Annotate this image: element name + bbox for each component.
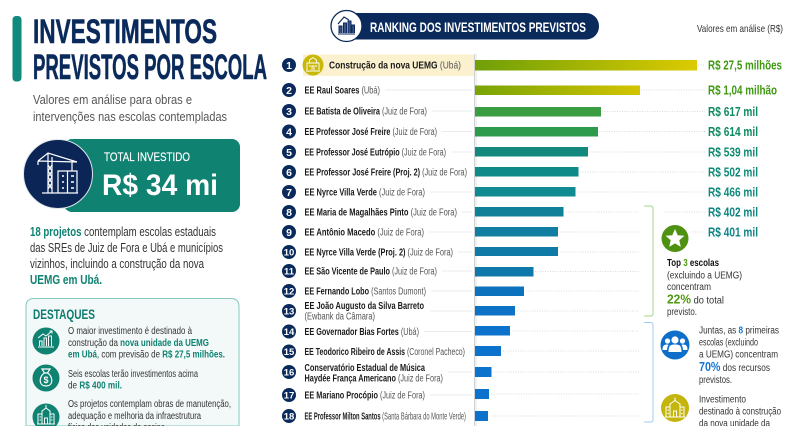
title: INVESTIMENTOS (33, 13, 217, 51)
row 5: EE Professor José Eutrópio (Juiz de Fora) (304, 148, 446, 158)
row 3: 3 (286, 106, 292, 118)
row 3: EE Batista de Oliveira (Juiz de Fora) (304, 106, 427, 118)
row 9 (282, 225, 758, 240)
row 3: R$ 617 mil (708, 105, 758, 119)
callout text: concentram (667, 282, 711, 293)
row 8: 8 (286, 207, 292, 219)
row 13: EE João Augusto da Silva Barreto (304, 301, 424, 312)
row 15: EE Teodorico Ribeiro de Assis (Coronel Pacheco) (304, 347, 465, 358)
row 4: 4 (286, 126, 292, 138)
row 12 (282, 284, 639, 298)
row 16 (282, 363, 639, 384)
callout text: escolas (excluindo (699, 338, 758, 348)
icon: money bag (32, 364, 60, 392)
row 9: 9 (286, 227, 292, 239)
highlight text: project scope: adequação e melhoria da infraestrutura (68, 411, 201, 422)
row 2: 2 (286, 85, 292, 97)
row 18: EE Professor Milton Santos (Santa Bárbara do Monte Verde) (304, 412, 466, 422)
highlight text: biggest investment: em Ubá, com previsão de R$ 27,5 milhões. (68, 350, 225, 360)
callout text: destinado à construção (699, 406, 781, 418)
row 5: 5 (286, 147, 292, 159)
callout text (699, 326, 779, 386)
row 2 (282, 83, 777, 98)
row 1: R$ 27,5 milhões (708, 58, 782, 72)
row 2: R$ 1,04 milhão (708, 84, 777, 98)
total label: TOTAL INVESTIDO (104, 150, 190, 164)
row 4 (282, 124, 758, 139)
row 15: 15 (284, 347, 295, 358)
title block (12, 13, 267, 87)
icon: crane and building (24, 140, 92, 208)
callout text: Top 3 escolas (667, 258, 719, 269)
row 5: R$ 539 mil (708, 146, 758, 160)
icon: money bag: $ (43, 375, 49, 385)
callout text: 22% do total (667, 292, 724, 306)
row 11 (282, 264, 639, 278)
row 3 (282, 104, 758, 119)
row 5 (282, 145, 758, 160)
row 11: EE São Vicente de Paulo (Juiz de Fora) (304, 266, 437, 278)
intro paragraph: vizinhos, incluindo a construção da nova (30, 257, 204, 271)
row 6: 6 (286, 167, 292, 179)
row 1: 1 (286, 60, 292, 72)
callout text: previstos. (699, 375, 732, 386)
row 7: EE Nyrce Villa Verde (Juiz de Fora) (304, 188, 425, 198)
row 1: Construção da nova UEMG (Ubá) (329, 60, 461, 72)
row 10 (282, 245, 639, 259)
highlighted row background (303, 54, 474, 76)
row 6: R$ 502 mil (708, 166, 758, 180)
callout: top 3 schools (662, 225, 742, 318)
row 10: EE Nyrce Villa Verde (Proj. 2) (Juiz de Fora) (304, 248, 453, 258)
icon: star (662, 225, 688, 252)
panel: destaques (26, 298, 239, 426)
row 7 (282, 185, 758, 200)
title: PREVISTOS POR ESCOLA (33, 48, 267, 87)
callout: eight schools (660, 326, 779, 386)
row 13 (282, 301, 639, 322)
destaques heading: DESTAQUES (33, 306, 95, 322)
row 4: R$ 614 mil (708, 125, 758, 139)
row 2: EE Raul Soares (Ubá) (304, 86, 380, 96)
row 10: 10 (284, 248, 294, 258)
row 13: (Ewbank da Câmara) (304, 312, 375, 322)
row 14: EE Governador Bias Fortes (Ubá) (304, 327, 419, 338)
callout text (667, 258, 742, 318)
callout text: Investimento (699, 394, 746, 406)
row 16: 16 (284, 368, 294, 378)
highlight text: six schools (68, 369, 198, 392)
row 11: 11 (284, 266, 295, 278)
row 8: EE Maria de Magalhães Pinto (Juiz de Fora) (304, 208, 457, 218)
row 16: Haydée França Americano (Juiz de Fora) (304, 374, 443, 384)
highlight text: biggest investment (68, 326, 225, 360)
row 17: EE Mariano Procópio (Juiz de Fora) (304, 390, 425, 402)
icon: people (660, 330, 690, 360)
title (33, 13, 267, 87)
highlight text: six schools: de R$ 400 mil. (68, 380, 122, 392)
callout text: 70% dos recursos (699, 359, 770, 374)
callout text: Juntas, as 8 primeiras (699, 326, 779, 336)
row 17: 17 (284, 390, 294, 402)
row 1 (282, 54, 782, 76)
chart axis (474, 54, 477, 426)
row 6: EE Professor José Freire (Proj. 2) (Juiz de Fora) (304, 168, 467, 178)
row 15 (282, 344, 639, 358)
bracket: top schools (644, 206, 653, 316)
callout text: (excluindo a UEMG) (667, 270, 742, 282)
ranking header (331, 10, 599, 42)
row 9: R$ 401 mil (708, 226, 758, 240)
icon: growth chart (32, 328, 60, 354)
row 7: R$ 466 mil (708, 186, 758, 200)
bracket: first schools (644, 322, 653, 422)
row 8: R$ 402 mil (708, 206, 758, 220)
icon: university building (661, 394, 689, 422)
callout text (699, 394, 781, 426)
row 12: EE Fernando Lobo (Santos Dumont) (304, 286, 426, 298)
intro paragraph: 18 projetos contemplam escolas estaduais (30, 225, 216, 239)
highlight text: biggest investment: construção da nova unidade da UEMG (68, 338, 209, 349)
total invested card (24, 139, 240, 212)
title accent bar (12, 16, 22, 82)
ranking bar chart (282, 54, 782, 423)
subtitle: Valores em análise para obras e (33, 92, 192, 107)
row 18 (282, 409, 639, 423)
total value: R$ 34 mi (102, 169, 218, 202)
highlight text: biggest investment: O maior investimento é destinado à (68, 326, 192, 337)
row 12: 12 (284, 286, 294, 298)
row 9: EE Antônio Macedo (Juiz de Fora) (304, 228, 424, 238)
highlight text: project scope (68, 399, 231, 426)
row 17 (282, 388, 639, 402)
intro paragraph (30, 225, 223, 287)
callout text: a UEMG) concentram (699, 350, 778, 360)
row 18: 18 (284, 412, 294, 422)
subtitle: intervenções nas escolas contempladas (33, 109, 227, 124)
icon: school building (32, 404, 60, 426)
callout: new unit (661, 394, 781, 426)
highlight text: project scope: Os projetos contemplam obras de manutenção, (68, 399, 231, 410)
row 6 (282, 165, 758, 180)
row 4: EE Professor José Freire (Juiz de Fora) (304, 127, 437, 138)
highlight text: six schools: Seis escolas terão investimentos acima (68, 369, 198, 380)
callout text: previsto. (667, 307, 697, 318)
row 13: 13 (284, 306, 294, 318)
row 14 (282, 324, 639, 338)
row 16: Conservatório Estadual de Música (304, 363, 425, 374)
icon: building chart (331, 10, 362, 42)
row 7: 7 (286, 187, 292, 199)
subtitle (33, 92, 227, 124)
intro paragraph: UEMG em Ubá. (30, 273, 102, 287)
ranking heading: RANKING DOS INVESTIMENTOS PREVISTOS (370, 19, 586, 35)
intro paragraph: das SREs de Juiz de Fora e Ubá e municípios (30, 241, 223, 255)
row 8 (282, 205, 758, 220)
row 14: 14 (284, 327, 295, 338)
